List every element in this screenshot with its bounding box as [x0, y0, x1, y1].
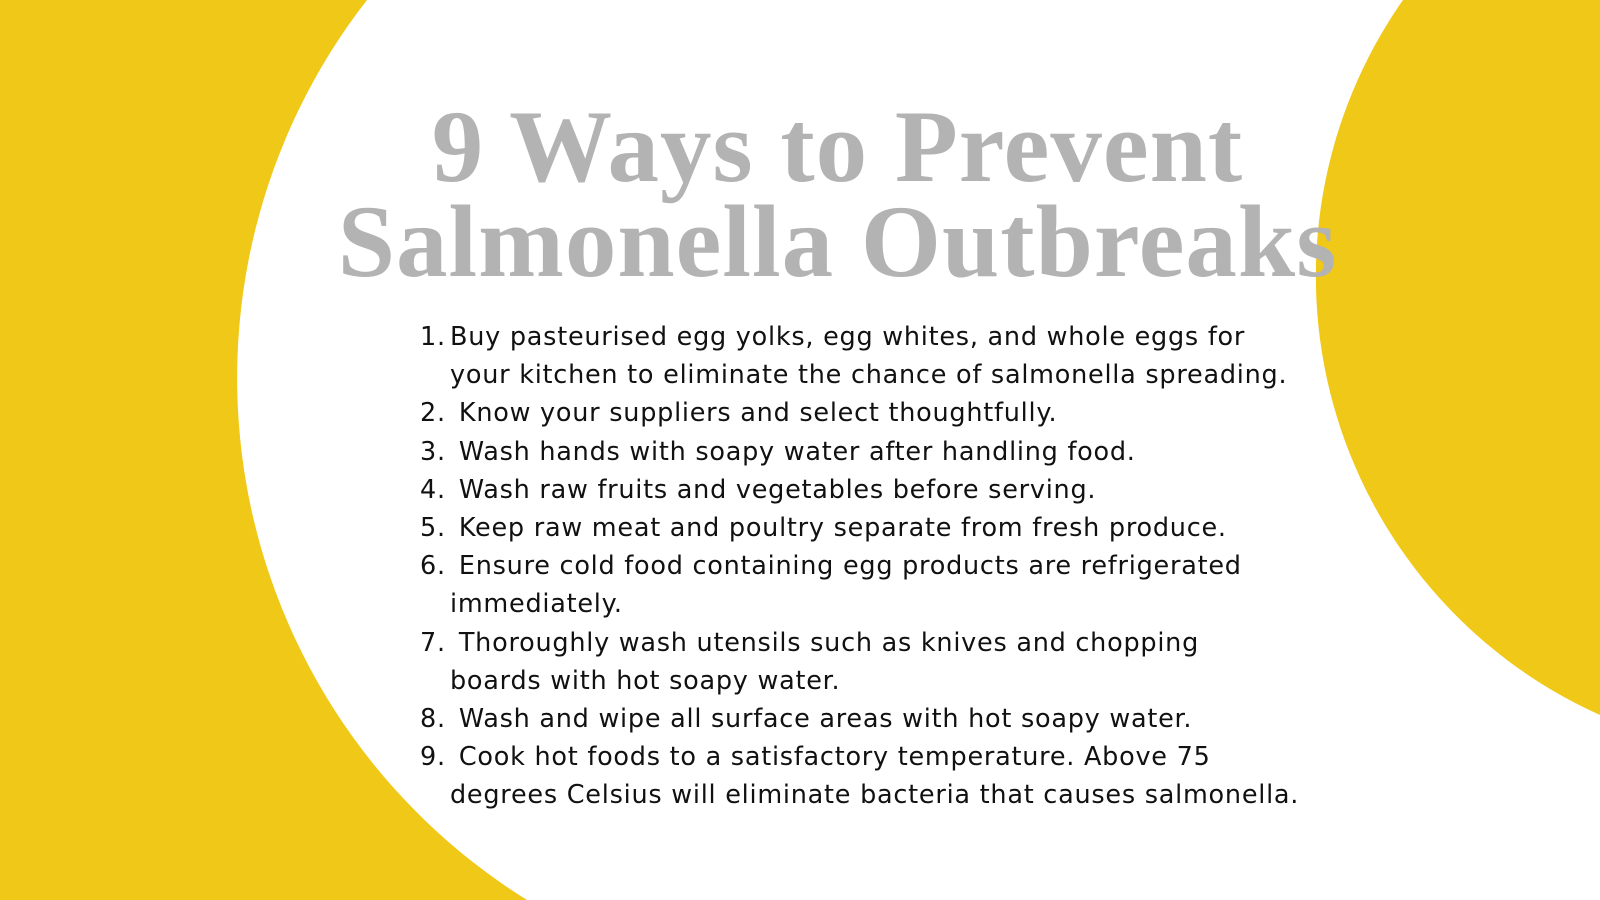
tip 1 — [420, 322, 1287, 390]
tip 8: 8. — [420, 704, 446, 734]
tip 9 — [420, 742, 1299, 810]
tip 8: Wash and wipe all surface areas with hot soapy water. — [459, 704, 1192, 734]
tip 2: 2. — [420, 398, 446, 428]
tip 6: Ensure cold food containing egg products are refrigerated — [459, 551, 1242, 581]
tip 9: degrees Celsius will eliminate bacteria that causes salmonella. — [450, 780, 1299, 810]
title — [338, 90, 1337, 299]
tip 7: 7. — [420, 628, 446, 658]
tip 9: Cook hot foods to a satisfactory temperature. Above 75 — [459, 742, 1211, 772]
tip 7: boards with hot soapy water. — [450, 666, 840, 696]
title: 9 Ways to Prevent — [432, 90, 1243, 204]
tip 6 — [420, 551, 1242, 619]
tip 7: Thoroughly wash utensils such as knives and chopping — [459, 628, 1199, 658]
tip 4: 4. — [420, 475, 446, 505]
tip 1: 1. — [420, 322, 446, 352]
tip 1: your kitchen to eliminate the chance of salmonella spreading. — [450, 360, 1287, 390]
tip 9: 9. — [420, 742, 446, 772]
tip 5: 5. — [420, 513, 446, 543]
title: Salmonella Outbreaks — [338, 185, 1337, 299]
tip 7 — [420, 628, 1199, 696]
list of prevention tips — [420, 322, 1299, 810]
tip 5: Keep raw meat and poultry separate from fresh produce. — [459, 513, 1227, 543]
right yellow circle — [1316, 0, 1600, 715]
tip 1: Buy pasteurised egg yolks, egg whites, and whole eggs for — [450, 322, 1245, 352]
tip 4: Wash raw fruits and vegetables before serving. — [459, 475, 1096, 505]
tip 6: 6. — [420, 551, 446, 581]
left yellow region — [0, 0, 527, 900]
tip 6: immediately. — [450, 589, 623, 619]
tip 2: Know your suppliers and select thoughtfully. — [459, 398, 1057, 428]
tip 3: 3. — [420, 437, 446, 467]
tip 3: Wash hands with soapy water after handling food. — [459, 437, 1136, 467]
